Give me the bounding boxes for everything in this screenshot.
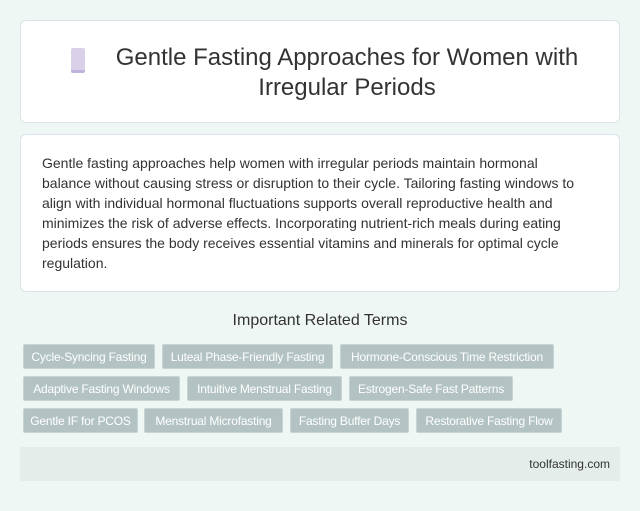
tags: Cycle-Syncing Fasting (31, 350, 147, 364)
footer (20, 447, 620, 481)
icon: scroll (71, 48, 85, 73)
terms heading: Important Related Terms (233, 312, 407, 329)
description text: Gentle fasting approaches help women with irregular periods maintain hormonal balance without causing stress or disruption to their cycle. Tailoring fasting windows to align with individual hormonal fluctuations supports overall reproductive health and minimizes the risk of adverse effects. Incorporating nutrient-rich meals during eating periods ensures the body receives essential vitamins and minerals for optimal cycle regulation. (42, 155, 574, 271)
tags: Menstrual Microfasting (155, 414, 272, 428)
tags: Adaptive Fasting Windows (33, 382, 170, 396)
tags: Estrogen-Safe Fast Patterns (358, 382, 504, 396)
tags: Hormone-Conscious Time Restriction (351, 350, 543, 364)
description card (20, 134, 620, 292)
tags: Gentle IF for PCOS (30, 414, 131, 428)
tags: Luteal Phase-Friendly Fasting (171, 350, 324, 364)
footer text: toolfasting.com (529, 457, 610, 471)
tags: Restorative Fasting Flow (425, 414, 553, 428)
tags: Intuitive Menstrual Fasting (197, 382, 332, 396)
title: Gentle Fasting Approaches for Women with Irregular Periods (116, 44, 578, 101)
header card (20, 20, 620, 123)
tags: Fasting Buffer Days (299, 414, 400, 428)
